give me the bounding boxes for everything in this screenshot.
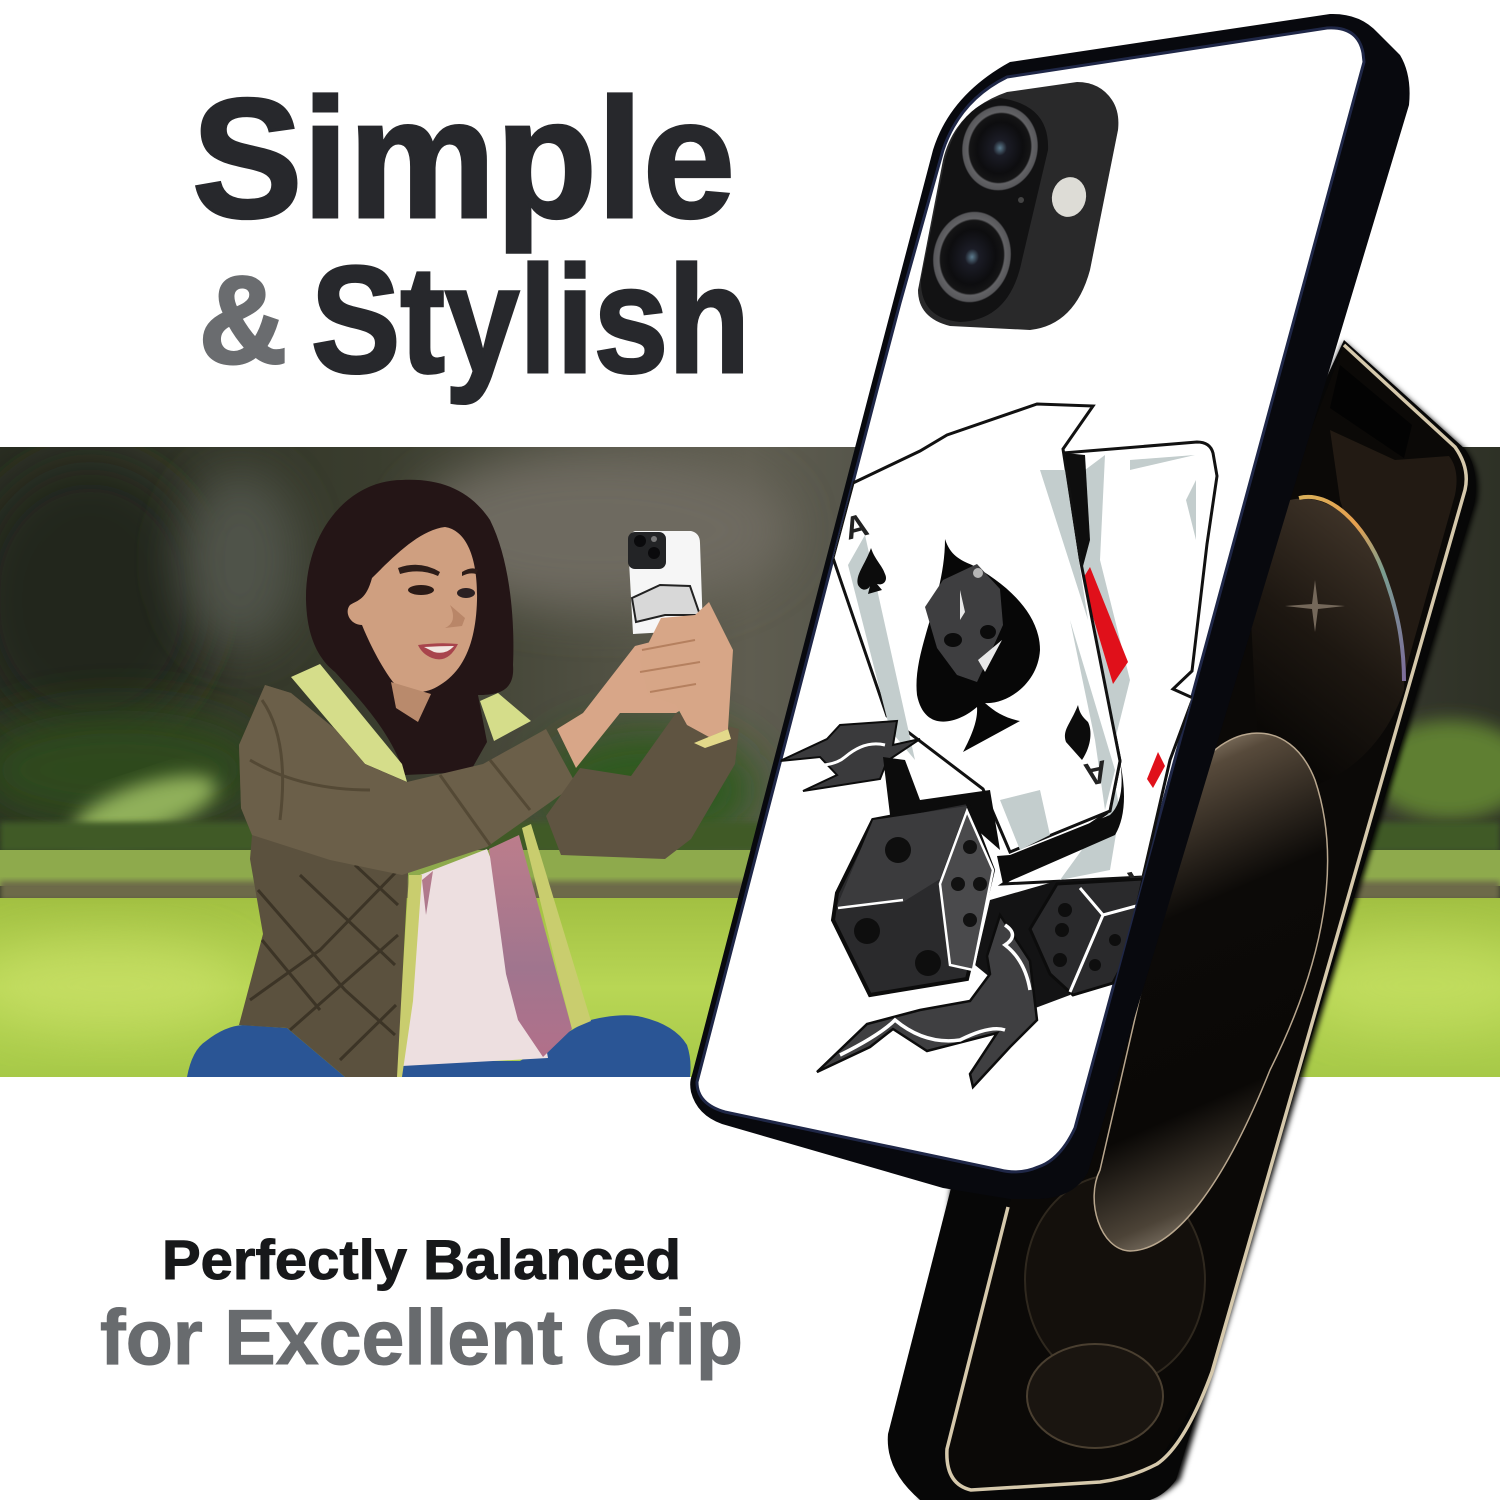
fingers and far hand [640,602,733,737]
artwork: bottom card swoosh [997,761,1124,884]
brows eyes nose mouth [398,565,478,659]
gold bezel [947,345,1466,1490]
camera lens top [954,98,1046,198]
artwork: rear ace card: A [1124,860,1156,902]
notch [1330,365,1412,458]
case body [690,14,1410,1199]
woman taking a selfie [187,480,739,1077]
wristband [694,729,731,748]
far sleeve [546,713,739,859]
artwork: rear ace card [1003,442,1217,902]
caption: Perfectly Balanced for Excellent Grip: for Excellent Grip [100,1293,743,1381]
near sleeve [239,685,576,875]
artwork: dark gap between dice [975,878,1140,1010]
near hand [557,630,702,768]
neck [391,682,431,722]
lens cluster [921,98,1048,322]
artwork: lower flame [817,915,1037,1087]
camera lens bottom [924,204,1020,310]
photo band: park background [0,447,1500,1077]
large wallpaper swirl [1094,733,1328,1251]
soft edge shadow [920,342,1478,1500]
spade with skull [916,539,1040,752]
upper wallpaper swirl [1250,498,1404,792]
jacket quilting [250,865,398,1060]
jeans [187,1015,691,1077]
phone body [888,340,1476,1500]
caption: Perfectly Balanced for Excellent Grip: Perfectly Balanced [162,1228,681,1291]
screen [947,345,1466,1487]
star highlight [1285,580,1345,632]
case artwork [780,404,1217,1087]
yellow collar [291,664,531,782]
small phone held up [628,531,703,634]
artwork: front ace of spades: A [1081,753,1111,793]
upper right screen glow [1330,430,1457,690]
rear phone showing screen [888,340,1478,1500]
rainbow arc [1299,497,1404,681]
artwork: front ace of spades: A [840,506,872,547]
yellow vest lining [396,824,591,1077]
artwork: large die [833,802,993,995]
jacket body [239,685,408,1077]
heading: Simple and Stylish: & [199,252,287,390]
face [348,527,477,692]
case white back [697,28,1364,1172]
t-shirt [398,849,548,1066]
camera flash [1048,174,1090,220]
artwork: upper flame [780,721,920,791]
camera module [918,82,1118,330]
heading: Simple and Stylish: Stylish [311,235,750,405]
hair [306,480,513,775]
caption: Perfectly Balanced for Excellent Grip [100,1228,743,1381]
heading: Simple and Stylish [192,64,750,405]
lower wallpaper swirl [1025,1175,1205,1385]
artwork: small die [1030,879,1143,995]
microphone [1018,197,1024,203]
artwork: black wedge behind die [883,757,1000,850]
artwork: front ace of spades [833,404,1120,852]
bottom wallpaper swirl [1027,1344,1163,1448]
main phone case [690,14,1410,1199]
heading: Simple and Stylish: Simple [192,64,735,254]
plaid shirt [422,835,572,1057]
